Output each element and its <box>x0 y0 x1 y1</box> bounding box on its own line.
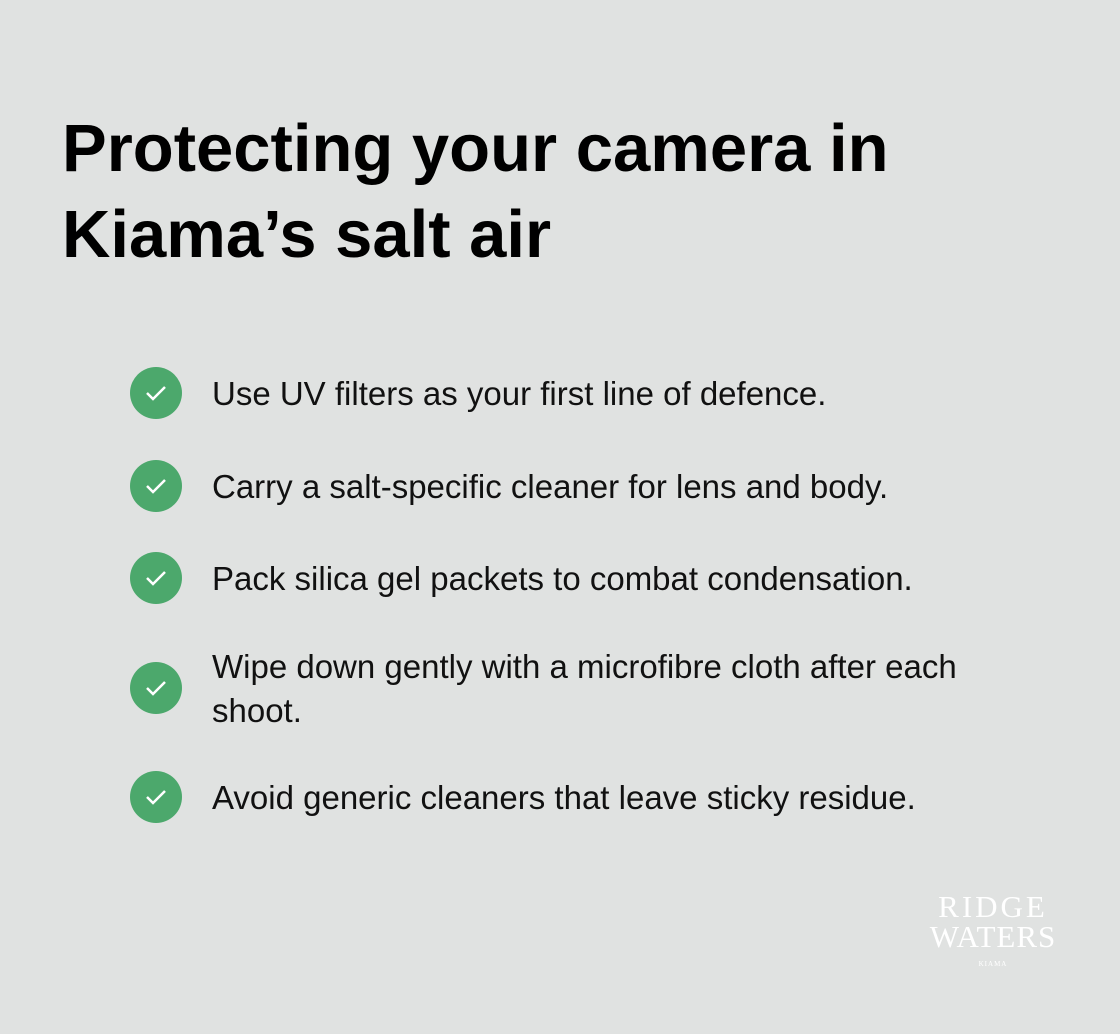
icon: check <box>130 771 182 823</box>
logo: WATERS <box>930 919 1056 954</box>
item 5 <box>130 771 916 823</box>
logo: KIAMA <box>979 960 1007 968</box>
item 1 <box>130 367 826 419</box>
logo <box>930 889 1056 968</box>
text: Pack silica gel packets to combat condensation. <box>212 560 913 597</box>
text: Avoid generic cleaners that leave sticky residue. <box>212 779 916 816</box>
icon: check <box>130 460 182 512</box>
text <box>212 648 957 729</box>
icon: check <box>130 662 182 714</box>
icon: check <box>130 367 182 419</box>
title: Kiama’s salt air <box>62 197 551 272</box>
text: Use UV filters as your first line of defence. <box>212 375 826 412</box>
item 2 <box>130 460 888 512</box>
text: shoot. <box>212 692 302 729</box>
text: Wipe down gently with a microfibre cloth after each <box>212 648 957 685</box>
text: Carry a salt-specific cleaner for lens and body. <box>212 468 888 505</box>
icon: check <box>130 552 182 604</box>
item 3 <box>130 552 913 604</box>
title <box>62 111 889 272</box>
item 4 <box>130 648 957 729</box>
title: Protecting your camera in <box>62 111 889 186</box>
logo: RIDGE <box>938 889 1048 924</box>
